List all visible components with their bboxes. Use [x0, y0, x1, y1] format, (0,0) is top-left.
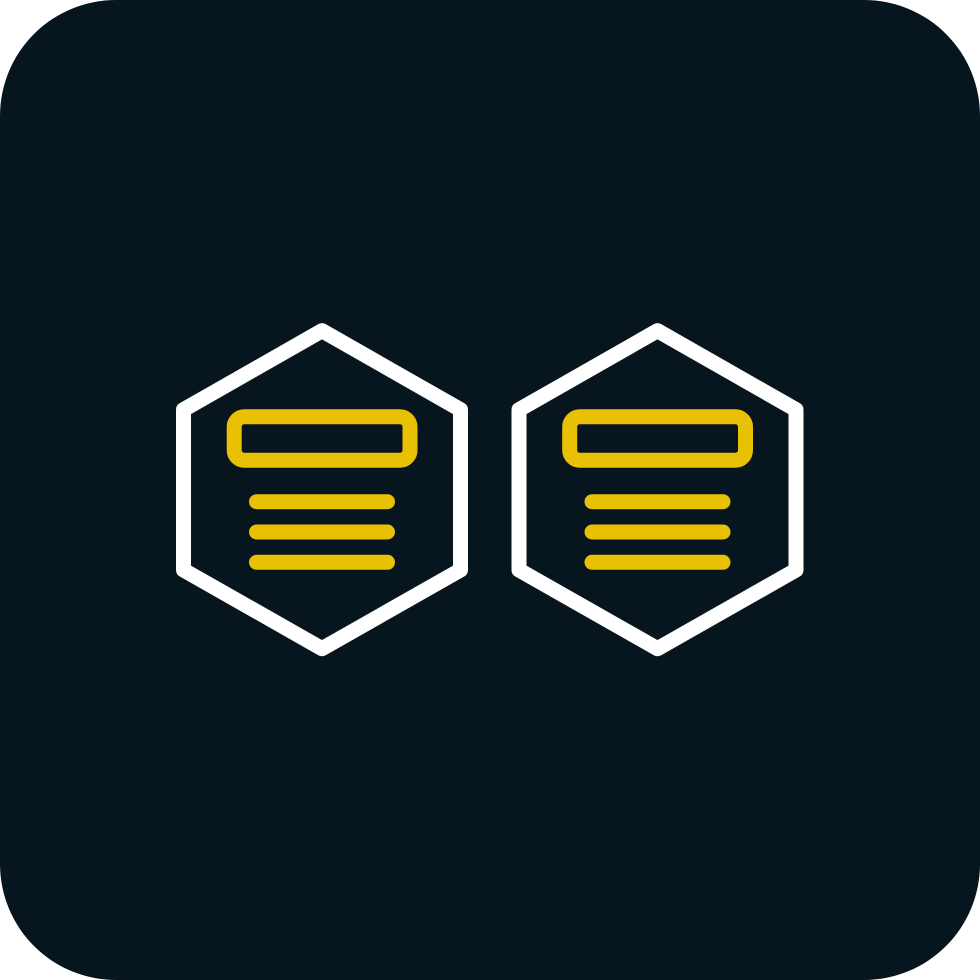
left hexagon outline: [184, 331, 460, 649]
icon: left hexagon: [184, 331, 460, 649]
left header box: [234, 417, 410, 460]
left text lines: [256, 502, 388, 562]
right header box: [570, 417, 746, 460]
right hexagon outline: [519, 331, 796, 649]
icon: right hexagon: [519, 331, 796, 649]
right text lines: [592, 502, 723, 562]
